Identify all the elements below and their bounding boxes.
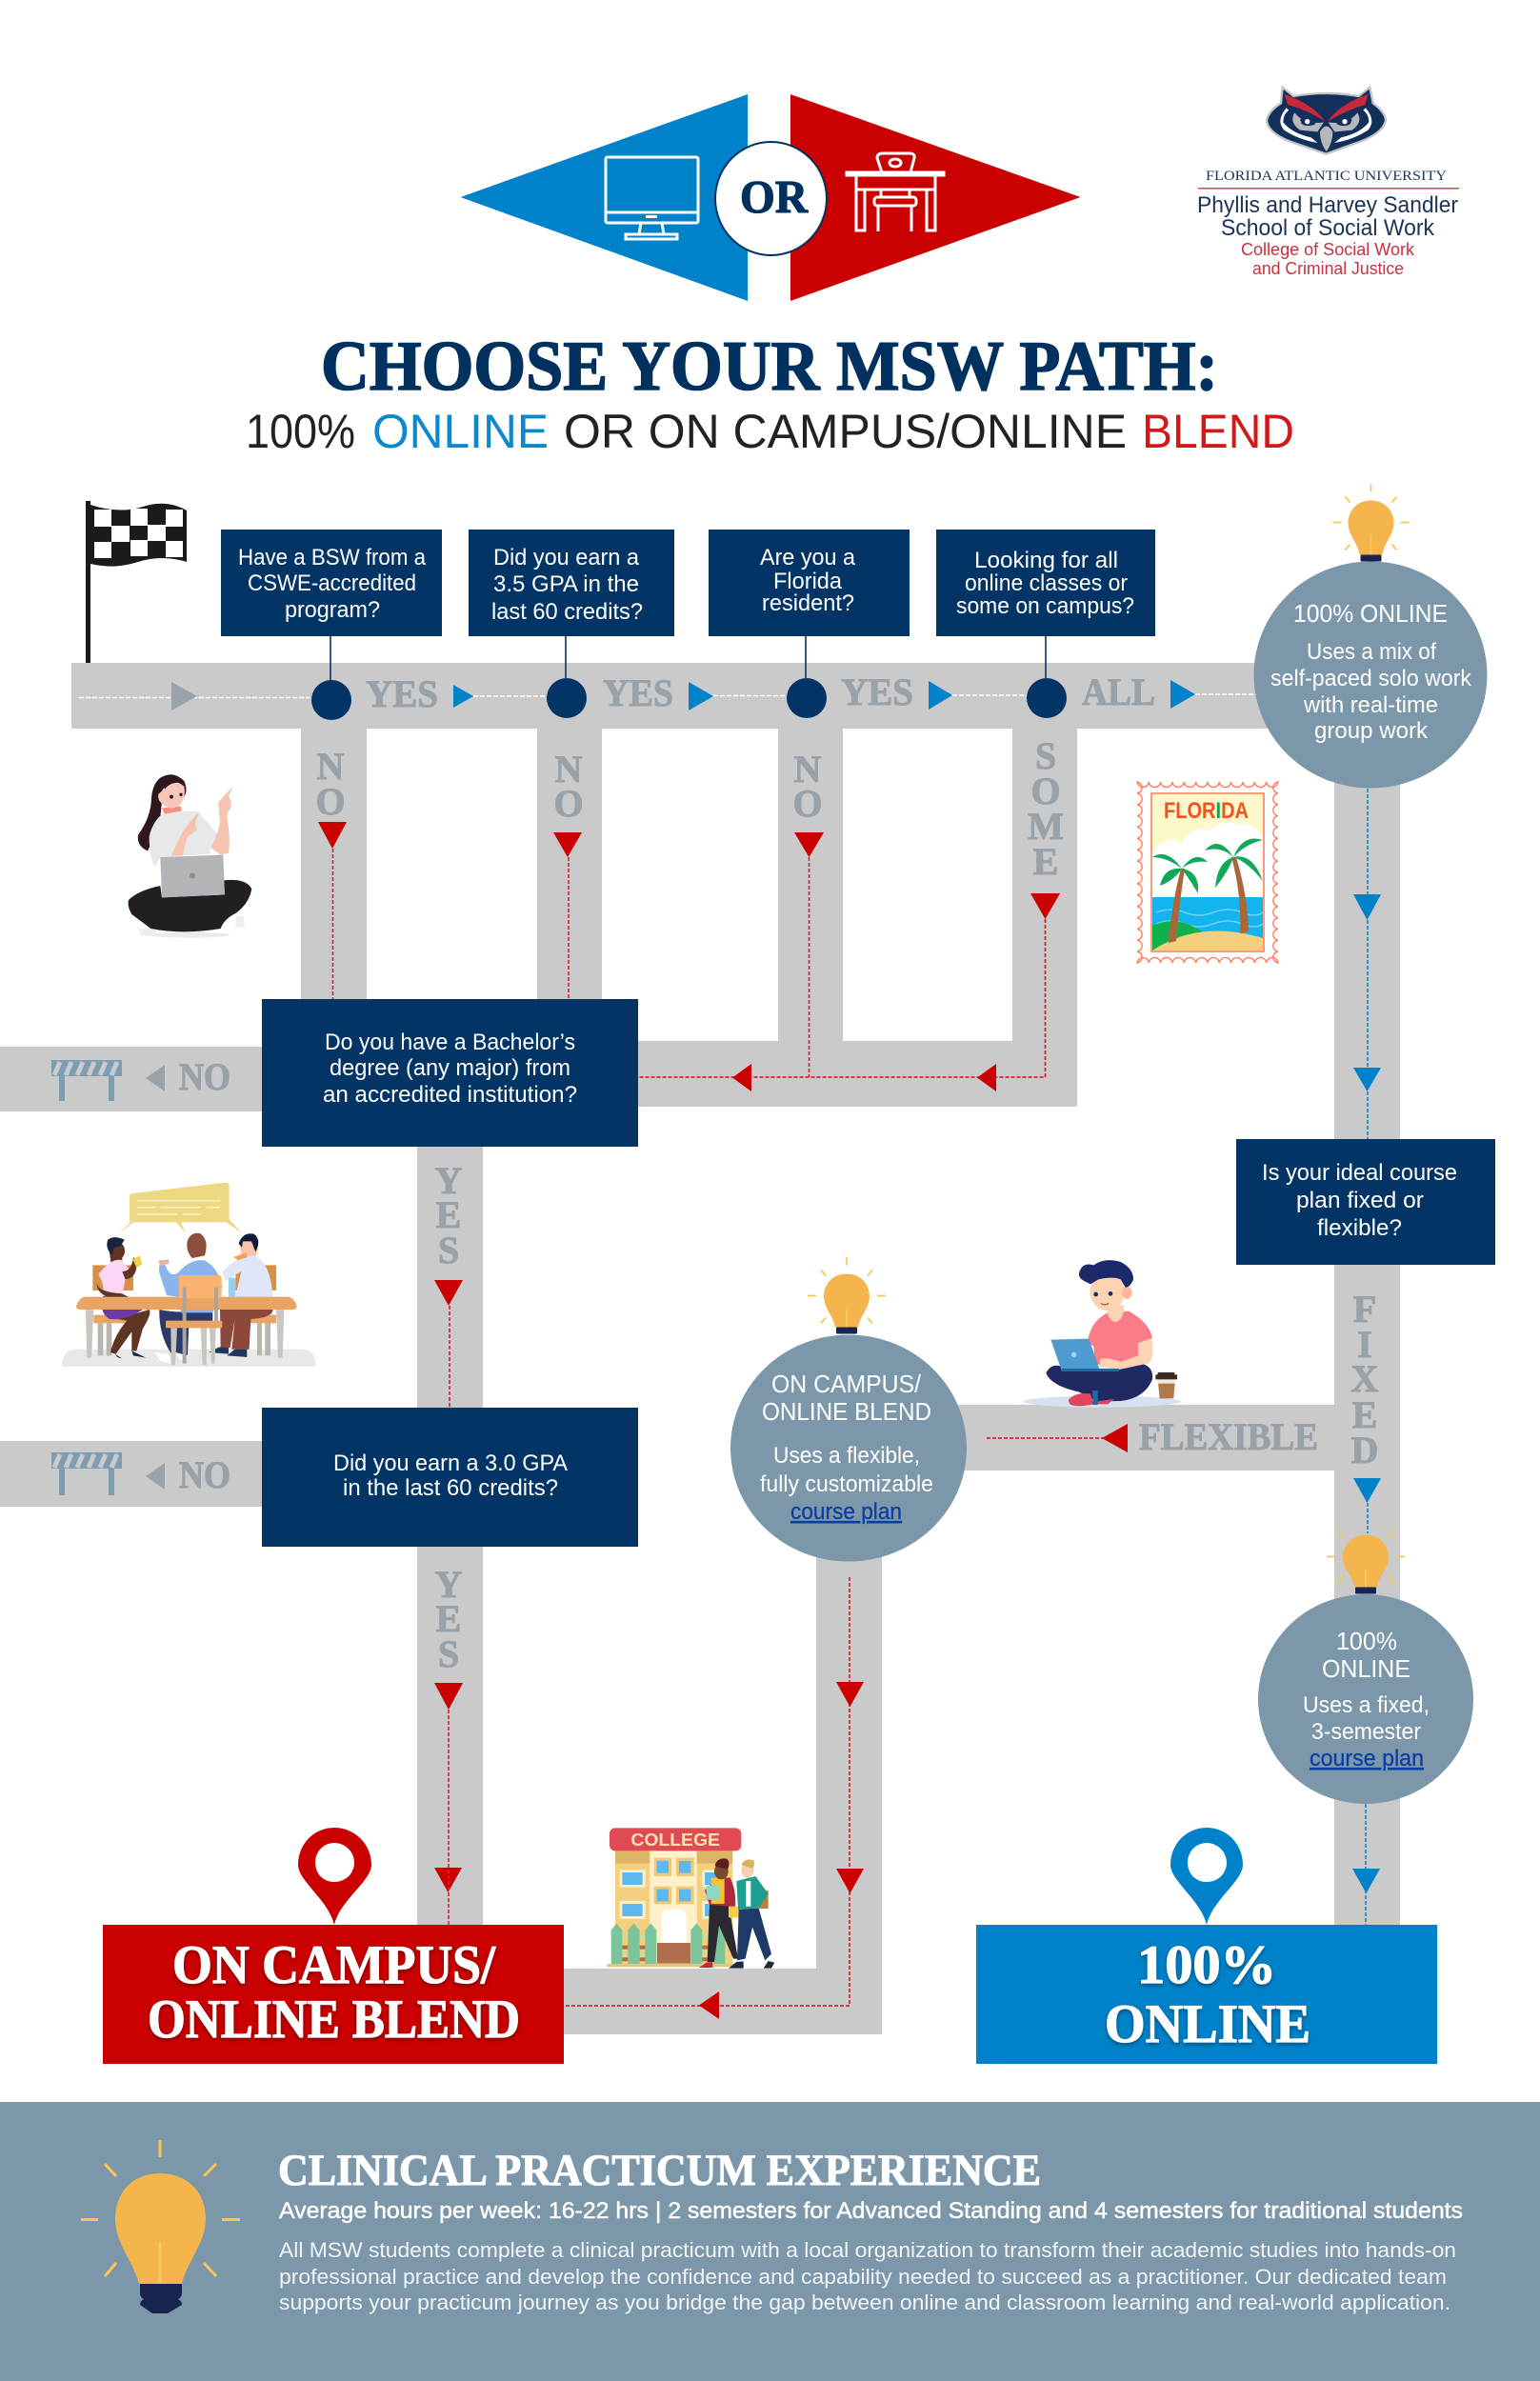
- info circle: on campus online blend: [730, 1335, 967, 1562]
- illustration: students talking at table: [62, 1183, 316, 1367]
- NO branch 3: [792, 748, 824, 1077]
- roadblock NO 2: NO: [179, 1453, 230, 1496]
- SOME branch: E: [1033, 840, 1058, 883]
- question 3: resident?: [762, 590, 854, 616]
- blue online triangle: [461, 94, 748, 301]
- hours line: Average hours per week: 16-22 hrs | 2 semesters for Advanced Standing and 4 semesters for traditional students: [279, 2198, 1463, 2224]
- question 2: last 60 credits?: [491, 599, 643, 625]
- question: 3.0 GPA: in the last 60 credits?: [343, 1475, 558, 1501]
- question: 3.0 GPA: Did you earn a 3.0 GPA: [333, 1451, 568, 1476]
- icon: lightbulb: [81, 2140, 240, 2313]
- college sign: [610, 1828, 741, 1851]
- yes labels and arrows on top path: YES: [603, 671, 673, 714]
- YES branch 5: Y: [435, 1563, 463, 1606]
- info circle: 100% online fixed: course plan: [1310, 1746, 1424, 1771]
- question 2: 3.5 GPA in the: [493, 571, 639, 597]
- subtitle: [246, 405, 1294, 458]
- icon: computer monitor: [606, 157, 698, 239]
- question 1: Have a BSW from a: [238, 545, 427, 570]
- school name: [1197, 192, 1458, 241]
- red dashed path to on campus blend: [564, 1577, 864, 2019]
- FIXED branch: X: [1351, 1357, 1379, 1400]
- question: bachelor's degree: degree (any major) from: [330, 1055, 570, 1081]
- question: 3.0 GPA: [262, 1408, 638, 1547]
- FLEXIBLE branch: FLEXIBLE: [1139, 1415, 1318, 1458]
- question: bachelor's degree: Do you have a Bachelor’s: [325, 1030, 575, 1055]
- question 1: program?: [285, 597, 380, 623]
- FLEXIBLE branch: [986, 1415, 1318, 1458]
- speech bubble: [119, 1183, 241, 1233]
- panel heading: CLINICAL PRACTICUM EXPERIENCE: [278, 2146, 1041, 2195]
- front chair: [166, 1275, 222, 1365]
- result box: 100% online: 100%: [1137, 1935, 1276, 1995]
- YES branch 5: E: [436, 1597, 461, 1640]
- info circle: on campus online blend: course plan: [790, 1499, 902, 1525]
- FIXED branch: E: [1352, 1393, 1377, 1436]
- college name: and Criminal Justice: [1252, 259, 1404, 278]
- floor: [62, 1350, 316, 1367]
- bulb: fixed: [1327, 1531, 1405, 1594]
- NO branch 1: O: [315, 780, 346, 823]
- SOME branch: [638, 734, 1064, 1091]
- info circle: 100% online fixed: Uses a fixed,: [1303, 1692, 1430, 1718]
- person left: [97, 1237, 150, 1359]
- YES branch 4: Y: [435, 1159, 463, 1202]
- info circle: 100% online fixed: 3-semester: [1311, 1719, 1421, 1745]
- roadblock NO 1: [51, 1055, 230, 1101]
- SOME branch: O: [1030, 770, 1061, 812]
- info circle: 100% online fixed: ONLINE: [1322, 1654, 1410, 1683]
- info circle: 100% online fixed: 100%: [1336, 1627, 1397, 1655]
- university name: FLORIDA ATLANTIC UNIVERSITY: [1206, 169, 1447, 184]
- YES branch 5: [434, 1563, 463, 1925]
- NO branch 2: O: [553, 782, 584, 825]
- description: All MSW students complete a clinical practicum with a local organization to transform their academic studies into hands-on: [279, 2238, 1456, 2262]
- yes labels and arrows on top path: [366, 670, 1195, 715]
- illustration: woman with laptop pointing: [129, 774, 251, 938]
- blue dashed path with arrows: top right: [1353, 789, 1381, 1139]
- logo: Florida Atlantic University: [1197, 88, 1459, 278]
- info circle: on campus online blend: ON CAMPUS/: [771, 1370, 922, 1398]
- question 1: CSWE-accredited: [248, 570, 416, 596]
- question: fixed or flexible: Is your ideal course: [1262, 1160, 1457, 1186]
- pin: blue: [1170, 1828, 1243, 1925]
- question: fixed or flexible: plan fixed or: [1296, 1188, 1424, 1213]
- start arrow: [171, 682, 197, 710]
- person center: [153, 1233, 222, 1364]
- illustration: Florida postage stamp: [1137, 782, 1278, 963]
- FIXED branch: D: [1351, 1429, 1378, 1471]
- yes labels and arrows on top path: YES: [841, 670, 913, 713]
- info circle: 100% online mix: with real-time: [1303, 692, 1438, 718]
- info circle: 100% online mix: 100% ONLINE: [1293, 599, 1448, 628]
- info circle: 100% online mix: [1253, 562, 1488, 789]
- result box: on campus online blend: [103, 1925, 564, 2064]
- NO branch 3: N: [794, 748, 822, 790]
- yes labels and arrows on top path: YES: [366, 672, 438, 715]
- description: professional practice and develop the confidence and capability needed to succeed as a practitioner. Our dedicated team: [279, 2265, 1447, 2289]
- subtitle: ONLINE: [372, 405, 549, 458]
- YES branch 4: [434, 1159, 463, 1408]
- student left: [699, 1858, 739, 1968]
- subtitle: BLEND: [1142, 405, 1294, 458]
- question 3: Florida: [773, 569, 843, 594]
- icon: desk and chair: [847, 153, 944, 231]
- subtitle: 100%: [246, 405, 355, 458]
- SOME branch: S: [1035, 734, 1056, 777]
- question 2: Did you earn a: [493, 545, 640, 570]
- question: fixed or flexible: flexible?: [1317, 1215, 1402, 1241]
- icon: owl: [1267, 88, 1386, 154]
- OR circle: OR: [740, 170, 809, 223]
- student right: [729, 1859, 774, 1969]
- question 4: some on campus?: [956, 593, 1134, 619]
- bulb: top right: [1333, 484, 1410, 562]
- question 1: [221, 530, 442, 636]
- FIXED branch: F: [1353, 1288, 1376, 1331]
- info circle: 100% online mix: Uses a mix of: [1307, 639, 1436, 665]
- college name: [1241, 240, 1415, 278]
- FIXED branch: [1351, 1288, 1381, 1533]
- yes labels and arrows on top path: ALL: [1082, 670, 1155, 713]
- question 2: [469, 530, 674, 636]
- YES branch 4: S: [438, 1229, 459, 1271]
- question 4: [936, 530, 1155, 636]
- question: fixed or flexible: [1236, 1139, 1495, 1265]
- NO branch 2: [553, 748, 584, 1000]
- question 3: Are you a: [760, 545, 856, 570]
- school name: School of Social Work: [1221, 215, 1435, 241]
- NO branch 2: N: [555, 748, 583, 790]
- red campus triangle: [790, 94, 1080, 301]
- roadblock NO 2: [51, 1452, 230, 1496]
- info circle: on campus online blend: ONLINE BLEND: [762, 1397, 931, 1426]
- info circle: 100% online mix: group work: [1314, 718, 1429, 744]
- table: [76, 1297, 297, 1310]
- YES branch 5: S: [438, 1632, 459, 1675]
- title: CHOOSE YOUR MSW PATH:: [321, 328, 1218, 406]
- SOME branch: M: [1028, 805, 1064, 848]
- info circle: on campus online blend: fully customizable: [760, 1471, 933, 1497]
- NO branch 3: O: [792, 782, 823, 825]
- college sign: COLLEGE: [630, 1830, 720, 1850]
- info circle: 100% online fixed: [1258, 1594, 1473, 1804]
- top path dashed line: [79, 694, 1257, 697]
- header icon: online or campus diamond: [461, 94, 1080, 301]
- grey road network: [0, 663, 1400, 2034]
- OR circle: [715, 142, 827, 255]
- college name: College of Social Work: [1241, 240, 1415, 259]
- illustration: Florida postage stamp: FLORIDA: [1164, 798, 1249, 824]
- school name: Phyllis and Harvey Sandler: [1197, 192, 1458, 218]
- NO branch 1: N: [317, 745, 345, 788]
- blue dashed path to online: [1352, 1804, 1380, 1925]
- result box: on campus online blend: ON CAMPUS/: [172, 1935, 496, 1995]
- roadblock NO 1: NO: [179, 1055, 230, 1098]
- info circle: 100% online mix: self-paced solo work: [1270, 666, 1472, 691]
- illustration: boy with laptop: [1024, 1260, 1181, 1408]
- person right: [209, 1233, 273, 1357]
- question: bachelor's degree: [262, 999, 638, 1147]
- NO branch 1: [315, 745, 347, 1000]
- question 3: [709, 530, 910, 636]
- YES branch 4: E: [436, 1193, 461, 1236]
- chairs: [92, 1265, 276, 1291]
- result box: 100% online: ONLINE: [1105, 1994, 1310, 2054]
- question: bachelor's degree: an accredited institution?: [323, 1082, 577, 1108]
- description: [279, 2238, 1456, 2314]
- result box: 100% online: [976, 1925, 1437, 2064]
- description: supports your practicum journey as you bridge the gap between online and classroom learning and real-world application.: [279, 2291, 1450, 2314]
- question 4: Looking for all: [974, 548, 1118, 573]
- bulb: on campus blend: [808, 1257, 886, 1333]
- subtitle: OR ON CAMPUS/ONLINE: [564, 405, 1127, 458]
- question 4: online classes or: [965, 570, 1128, 596]
- pin: red: [298, 1828, 371, 1925]
- illustration: college building with students: [607, 1828, 774, 1969]
- decision nodes: [311, 636, 1067, 720]
- info circle: on campus online blend: Uses a flexible,: [773, 1443, 920, 1469]
- result box: on campus online blend: ONLINE BLEND: [148, 1990, 520, 2050]
- start flag: [86, 501, 187, 663]
- FIXED branch: I: [1357, 1323, 1372, 1366]
- panel: clinical practicum experience: [0, 2102, 1540, 2381]
